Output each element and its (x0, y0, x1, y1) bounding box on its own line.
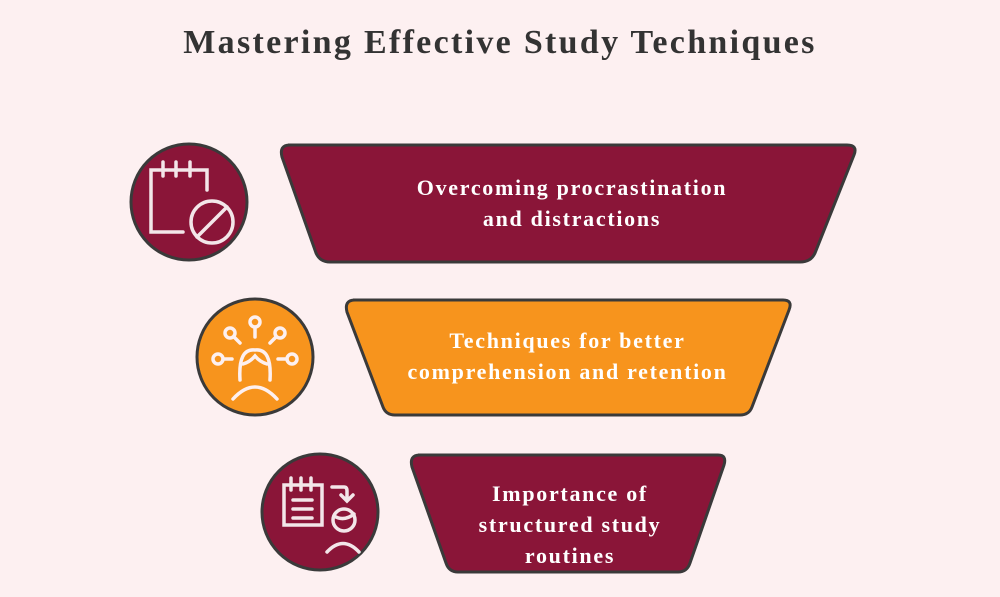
text: comprehension: comprehension and retention (407, 359, 728, 384)
text: comprehension: Techniques for better (449, 328, 686, 353)
text: routines: structured study (479, 512, 661, 537)
text: procrastination: Overcoming procrastination (417, 175, 727, 200)
text: routines (479, 481, 661, 568)
text: routines: Importance of (492, 481, 648, 506)
panel: procrastination (281, 145, 855, 262)
title: Mastering Effective Study Techniques (183, 24, 817, 61)
icon: person with ideas (197, 299, 313, 415)
text: procrastination: and distractions (483, 206, 661, 231)
panel: routines (411, 455, 725, 572)
text: procrastination (417, 175, 727, 231)
text: comprehension (407, 328, 728, 384)
panel: comprehension (346, 300, 790, 415)
icon: calendar blocked (131, 144, 247, 260)
icon: schedule to person (262, 454, 378, 570)
text: routines: routines (525, 543, 615, 568)
